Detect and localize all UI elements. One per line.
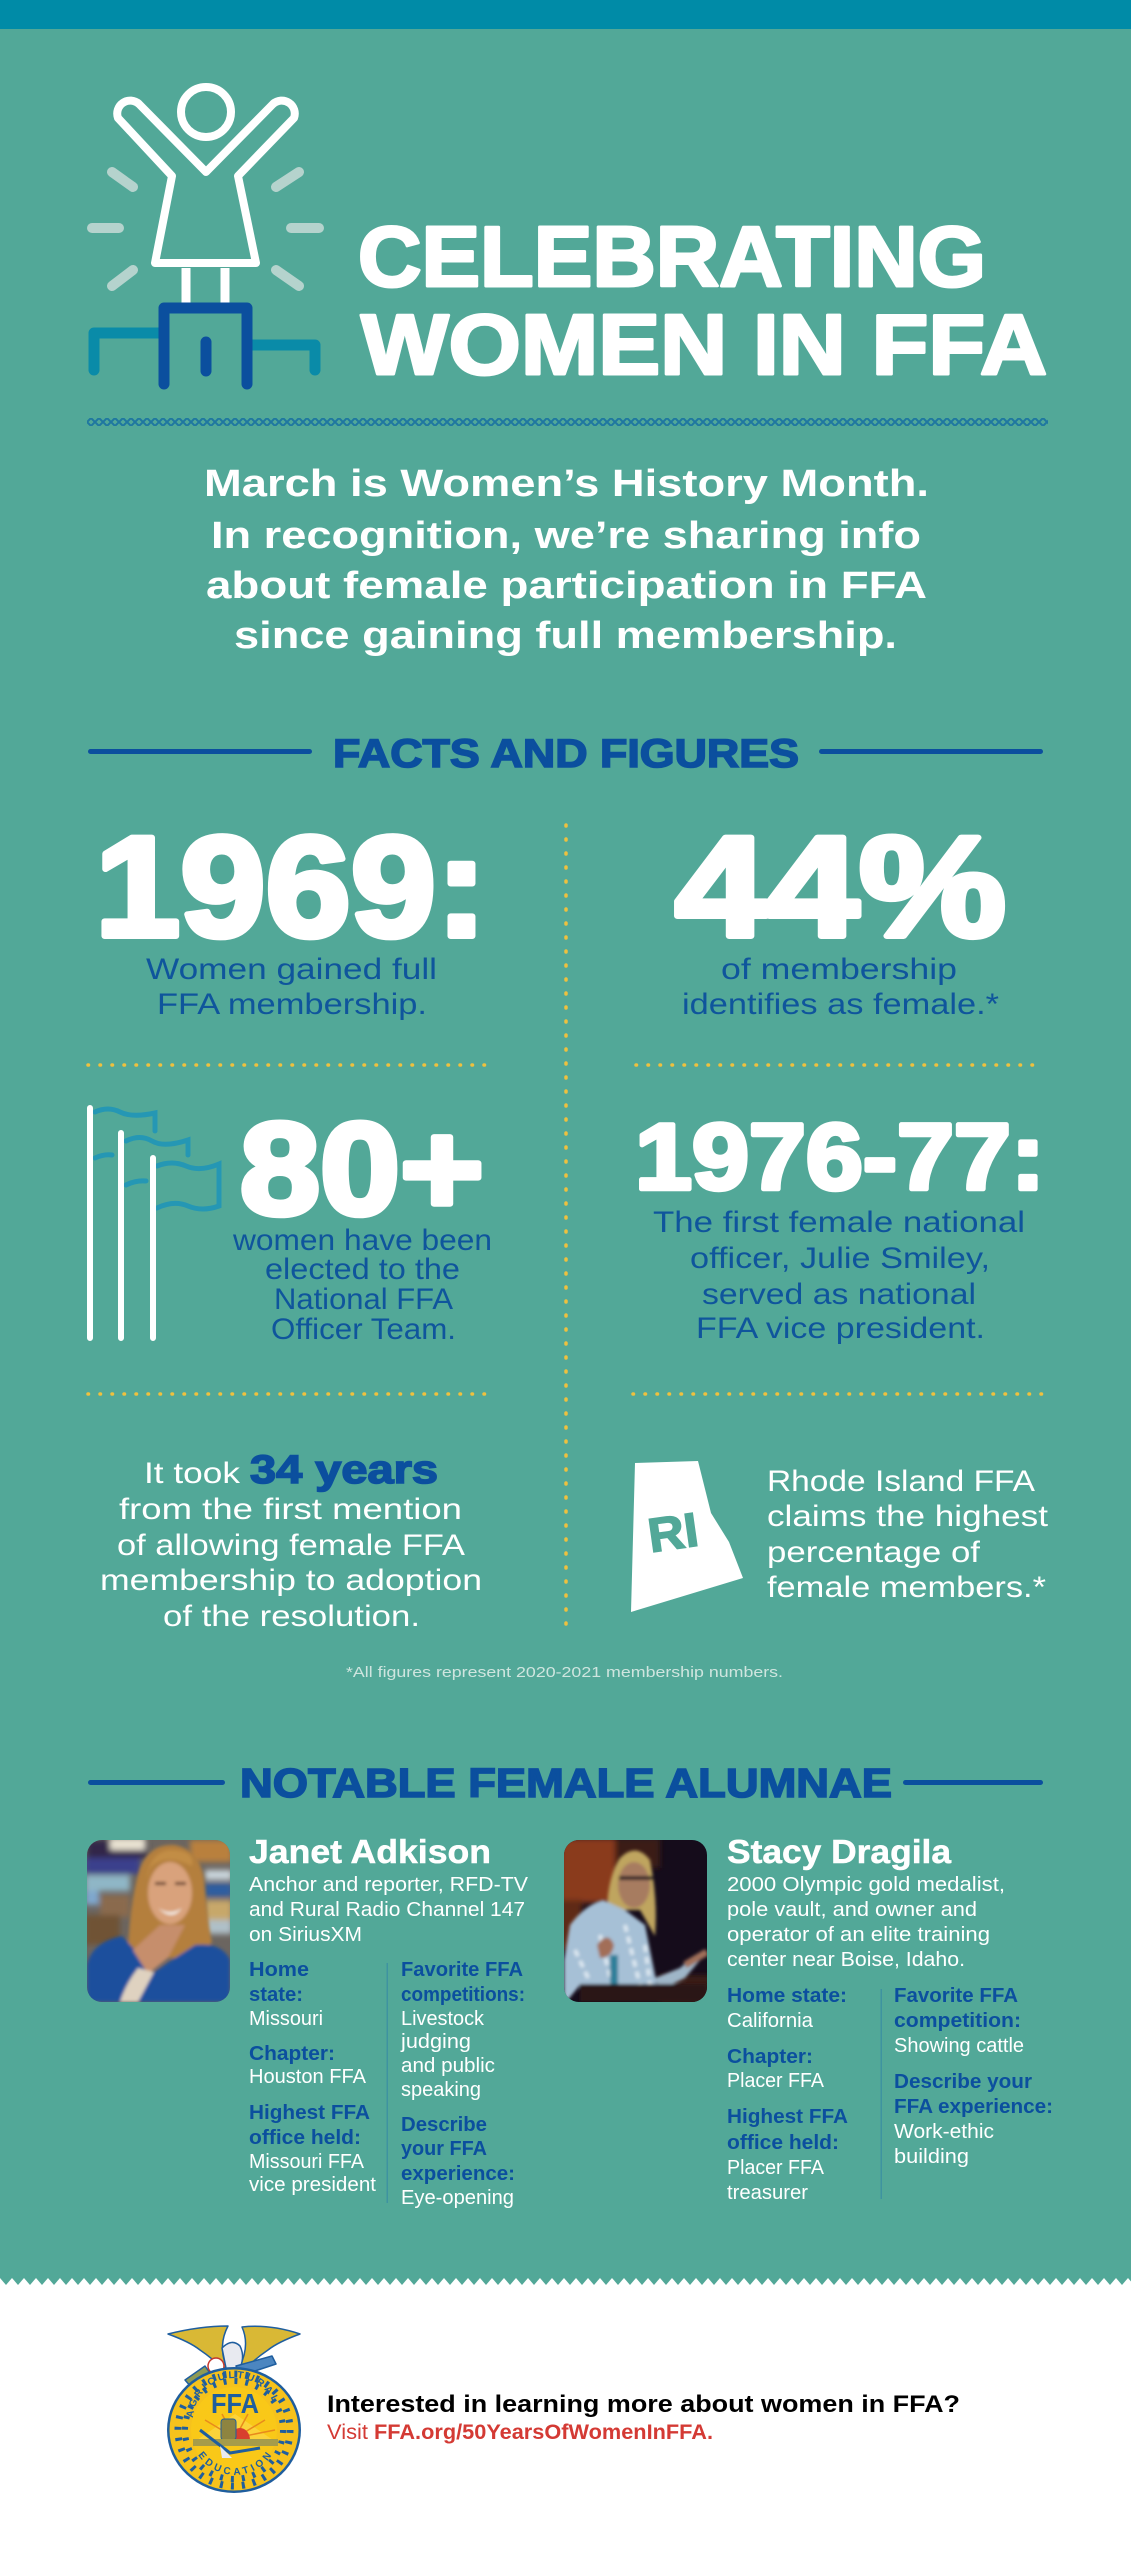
alumna: Stacy Dragila: Work-ethic [894, 2121, 994, 2143]
fact: 1976-77: officer, Julie Smiley, [690, 1242, 990, 1275]
heading: notable female alumnae [88, 1760, 1043, 1806]
fact: 34 years: It took [144, 1457, 241, 1490]
logo: FFA emblem: AGRICULTURAL [186, 2371, 278, 2418]
icon: woman celebrating on podium [92, 87, 319, 384]
top bar [0, 0, 1131, 29]
icon: Rhode Island state shape: RI [645, 1504, 702, 1563]
fact: 80+: 80+ [240, 1095, 484, 1242]
alumna: Stacy Dragila: operator of an elite training [727, 1924, 990, 1946]
alumna: Stacy Dragila: Favorite FFA [894, 1985, 1018, 2007]
alumna: Stacy Dragila: Placer FFA [727, 2157, 825, 2179]
alumna: Janet Adkison: Highest FFA [249, 2102, 370, 2124]
alumna: Janet Adkison: your FFA [401, 2138, 487, 2160]
alumna: Stacy Dragila: Placer FFA [727, 2070, 825, 2092]
alumna: Stacy Dragila: FFA experience: [894, 2096, 1053, 2118]
alumna: Stacy Dragila: Showing cattle [894, 2035, 1024, 2057]
alumna: Janet Adkison: Missouri [249, 2008, 323, 2030]
alumna: Janet Adkison: Houston FFA [249, 2066, 367, 2088]
intro text: about female participation in FFA [206, 565, 927, 607]
fact: 34 years: of the resolution. [163, 1600, 420, 1633]
alumna: Stacy Dragila: center near Boise, Idaho. [727, 1949, 965, 1971]
fact: Rhode Island: female members.* [767, 1571, 1046, 1604]
alumna: Janet Adkison: speaking [401, 2079, 481, 2101]
alumna: Janet Adkison: competitions: [401, 1984, 525, 2006]
alumna: Janet Adkison: Anchor and reporter, RFD-TV [249, 1874, 529, 1896]
alumna: Stacy Dragila: Highest FFA [727, 2106, 848, 2128]
fact: Rhode Island [767, 1465, 1049, 1604]
fact: 1976-77: 1976-77: [635, 1104, 1045, 1209]
photo: Janet Adkison [85, 1838, 232, 2002]
fact: 1969: 1969: [95, 808, 487, 967]
alumna: Stacy Dragila: pole vault, and owner and [727, 1899, 977, 1921]
fact: 80+: elected to the [265, 1253, 460, 1286]
fact: 1976-77: The first female national [653, 1206, 1025, 1239]
photo: Stacy Dragila [560, 1838, 710, 2005]
fact: 1976-77 [635, 1104, 1045, 1345]
fact: Rhode Island: Rhode Island FFA [767, 1465, 1035, 1498]
alumna: Janet Adkison: Eye-opening [401, 2187, 514, 2209]
fact: 34 years [100, 1448, 482, 1633]
call to action: FFA.org/50YearsOfWomenInFFA. [374, 2421, 713, 2444]
fact: 44 percent [675, 808, 1006, 1021]
title: WOMEN IN FFA [361, 298, 1047, 393]
alumna: Stacy Dragila: 2000 Olympic gold medalist, [727, 1874, 1005, 1896]
alumna: Janet Adkison: Janet Adkison [249, 1833, 491, 1870]
fact: 34 years: membership to adoption [100, 1564, 482, 1597]
alumna: Stacy Dragila: competition: [894, 2010, 1021, 2032]
logo: FFA emblem [167, 2325, 301, 2493]
fact: 1969: Women gained full [146, 953, 437, 986]
call to action [327, 2391, 960, 2444]
fact: Rhode Island: claims the highest [767, 1500, 1049, 1533]
icon: three flags [90, 1108, 219, 1338]
fact: 44 percent: 44% [675, 808, 1006, 967]
fact: 44 percent: of membership [721, 953, 957, 986]
fact: 34 years: 34 years [250, 1448, 438, 1492]
fact: 1976-77: served as national [702, 1278, 976, 1311]
alumna: Janet Adkison: state: [249, 1984, 303, 2006]
alumna: Janet Adkison: Describe [401, 2114, 487, 2136]
fact: 44 percent: identifies as female.* [682, 988, 999, 1021]
alumna: Janet Adkison: Livestock [401, 2008, 485, 2030]
alumna: Stacy Dragila: Describe your [894, 2071, 1032, 2093]
logo: FFA emblem: FFA [211, 2388, 259, 2419]
fact: Rhode Island: percentage of [767, 1536, 981, 1569]
logo wings and eagle [168, 2326, 300, 2388]
alumna: Janet Adkison: vice president [249, 2174, 376, 2196]
alumna: Stacy Dragila: building [894, 2146, 969, 2168]
title: CELEBRATING [358, 210, 986, 305]
alumna: Janet Adkison [249, 1833, 529, 2209]
fact: 1976-77: FFA vice president. [696, 1312, 985, 1345]
logo seal [167, 2367, 301, 2493]
alumna: Janet Adkison: judging [400, 2031, 471, 2053]
title [358, 210, 1047, 393]
footnote: *All figures represent 2020-2021 membership numbers. [346, 1664, 783, 1681]
footer panel [0, 2277, 1131, 2560]
alumna: Stacy Dragila: Chapter: [727, 2046, 813, 2068]
intro text: In recognition, we’re sharing info [211, 515, 921, 557]
alumna: Stacy Dragila: treasurer [727, 2182, 808, 2204]
alumna: Stacy Dragila: office held: [727, 2132, 839, 2154]
alumna: Janet Adkison: Chapter: [249, 2043, 335, 2065]
alumna: Janet Adkison: office held: [249, 2127, 361, 2149]
alumna: Janet Adkison: Missouri FFA [249, 2151, 365, 2173]
call to action: Interested in learning more about women in FFA? [327, 2391, 960, 2418]
alumna: Stacy Dragila [727, 1833, 1053, 2204]
fact: 1969: FFA membership. [157, 988, 427, 1021]
intro text [204, 463, 929, 657]
alumna: Janet Adkison: experience: [401, 2163, 515, 2185]
fact: 80+ [232, 1095, 492, 1346]
fact: 80+: Officer Team. [271, 1313, 456, 1346]
fact: 80+: National FFA [274, 1283, 453, 1316]
intro text: March is Women’s History Month. [204, 463, 929, 505]
call to action: Visit [327, 2421, 368, 2444]
fact: 34 years: from the first mention [119, 1493, 462, 1526]
fact: 80+: women have been [232, 1224, 492, 1257]
heading: notable female alumnae: NOTABLE FEMALE ALUMNAE [240, 1760, 892, 1806]
alumna: Stacy Dragila: Home state: [727, 1985, 847, 2007]
icon: Rhode Island state shape [631, 1461, 743, 1612]
heading: facts and figures: FACTS AND FIGURES [333, 732, 799, 776]
intro text: since gaining full membership. [234, 615, 897, 657]
alumna: Janet Adkison: Favorite FFA [401, 1959, 523, 1981]
fact: 34 years: of allowing female FFA [117, 1529, 465, 1562]
alumna: Janet Adkison: and Rural Radio Channel 147 [249, 1899, 525, 1921]
alumna: Stacy Dragila: California [727, 2010, 814, 2032]
fact: 1969 [95, 808, 487, 1021]
alumna: Janet Adkison: Home [249, 1959, 309, 1981]
logo: FFA emblem: EDUCATION [198, 2451, 272, 2476]
alumna: Stacy Dragila: Stacy Dragila [727, 1833, 952, 1870]
alumna: Janet Adkison: and public [401, 2055, 495, 2077]
heading: facts and figures [88, 732, 1043, 776]
alumna: Janet Adkison: on SiriusXM [249, 1924, 362, 1946]
